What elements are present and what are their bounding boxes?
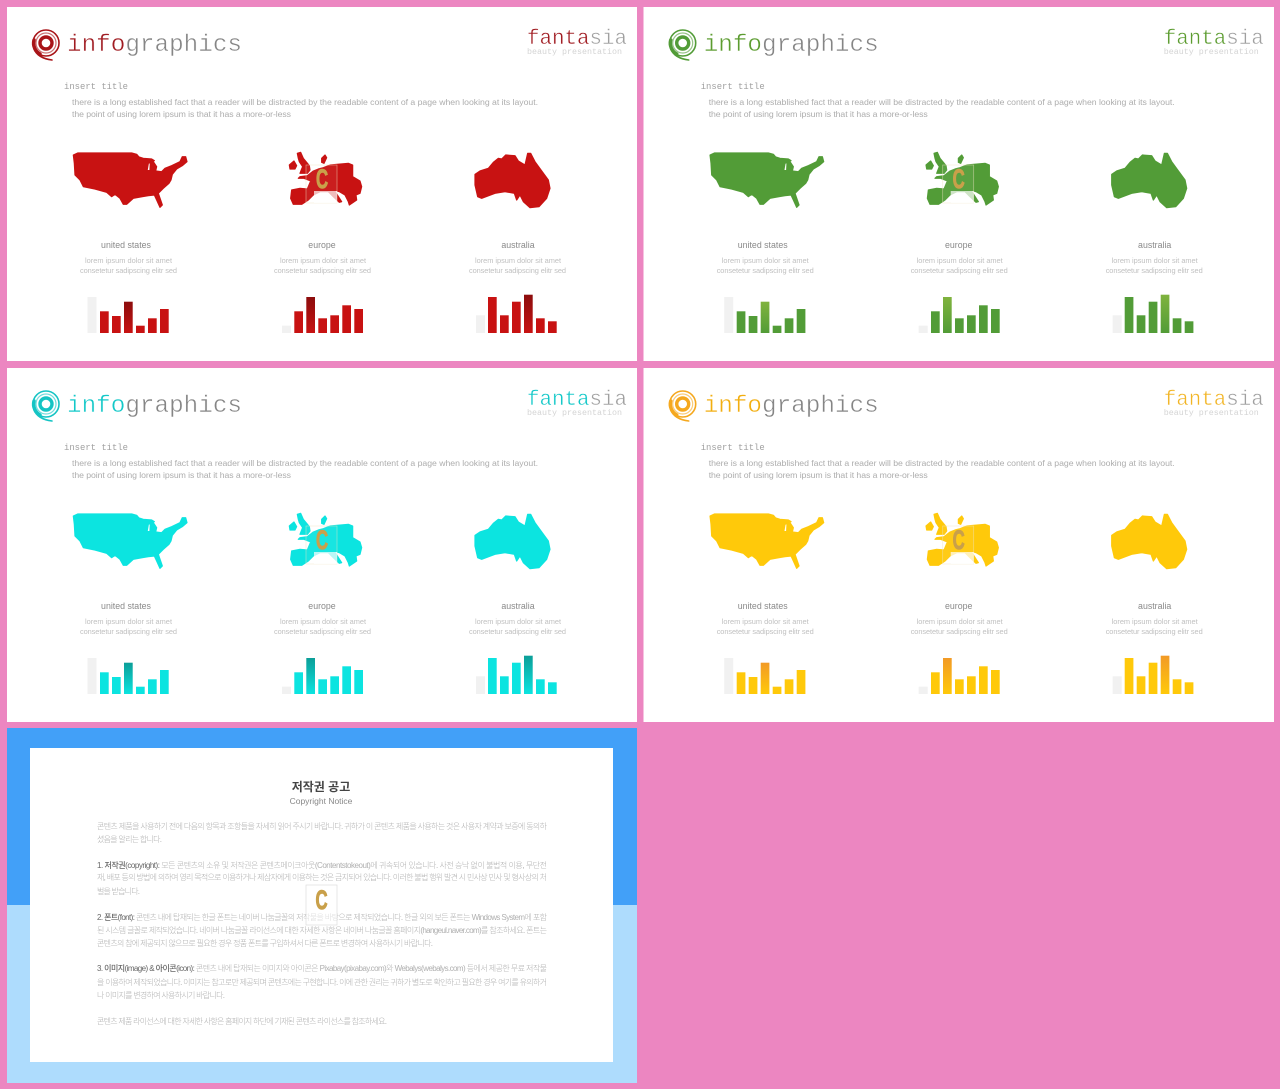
caption: europe: lorem ipsum dolor sit amet xyxy=(917,256,1003,265)
caption: united states xyxy=(717,617,814,636)
heading: copyright notice English: Copyright Notice xyxy=(290,796,353,806)
text: section 3 image and icon: 나 이미지를 변경하여 사용하시기 바랍니다. xyxy=(97,990,225,1000)
caption: united states: lorem ipsum dolor sit amet xyxy=(85,256,172,265)
text: section 2 font: 2. 폰트(font): 콘텐츠 내에 탑재되는 한글 폰트는 네이버 나눔글꼴의 저작물을 바탕으로 제작되었습니다. 한글 외의 보든 폰트는 Windows System에 포함 xyxy=(97,912,548,922)
label: united states: united states xyxy=(738,240,788,250)
label: europe: europe xyxy=(308,240,336,250)
caption: australia: lorem ipsum dolor sit amet xyxy=(475,256,561,265)
description text: the point of using lorem ipsum is that it has a more-or-less xyxy=(72,470,292,480)
brand: fantasia: fantasia xyxy=(527,28,627,51)
caption: australia: lorem ipsum dolor sit amet xyxy=(1112,617,1198,626)
caption: australia: consetetur sadipscing elitr sed xyxy=(469,266,566,275)
caption: australia: lorem ipsum dolor sit amet xyxy=(1112,256,1198,265)
title: infographics: infographics xyxy=(67,393,242,420)
caption: europe: consetetur sadipscing elitr sed xyxy=(911,627,1008,636)
icon: swirl logo xyxy=(670,30,696,60)
bar chart: united states xyxy=(724,297,805,333)
text: intro: 콘텐츠 제품을 사용하기 전에 다음의 항목과 조항들을 자세히 읽어 주시기 바랍니다. 귀하가 이 콘텐츠 제품을 사용하는 것은 사용자 계약과 보증에 동의하 xyxy=(97,821,548,831)
bar chart: europe xyxy=(919,297,1000,333)
caption: united states: lorem ipsum dolor sit amet xyxy=(85,617,172,626)
caption: united states: consetetur sadipscing elitr sed xyxy=(717,627,814,636)
map: australia xyxy=(475,514,550,569)
text: section 1 copyright: 1. 저작권(copyright): 모든 콘텐츠의 소유 및 저작권은 콘텐츠메이크아웃(Contentstokeout)에 귀속되어 있습니다. 사전 승낙 없이 불법적 이용, 무단전 xyxy=(97,860,547,870)
brand: fantasia: fantasia xyxy=(1164,389,1264,412)
bar chart: united states xyxy=(724,658,805,694)
bar chart: australia xyxy=(1113,295,1193,333)
heading: insert title: insert title xyxy=(701,82,765,92)
watermark logo xyxy=(306,885,337,925)
brand: fantasia: fantasia xyxy=(1164,28,1264,51)
text: intro: 셨음을 알리는 합니다. xyxy=(97,835,162,844)
description text xyxy=(72,97,538,119)
caption: united states: lorem ipsum dolor sit amet xyxy=(722,617,809,626)
description text xyxy=(72,458,538,480)
bar chart: australia xyxy=(476,295,557,333)
map: united states xyxy=(73,514,187,568)
caption: australia: consetetur sadipscing elitr sed xyxy=(469,627,566,636)
heading: insert title: insert title xyxy=(64,82,128,92)
label: australia: australia xyxy=(1138,240,1171,250)
description text xyxy=(709,458,1175,480)
caption: united states xyxy=(717,256,814,275)
bar chart: united states xyxy=(88,297,169,333)
caption: united states xyxy=(80,617,177,636)
text: section 1 copyright: 재, 배포 등의 방법에 의하여 영리 목적으로 이용하거나 제삼자에게 이용하는 것은 금지되어 있습니다. 이러한 불법 행위 발견 시 민사상 민사 및 형사상의 처 xyxy=(97,872,547,882)
label: europe: europe xyxy=(308,601,336,611)
caption: australia: consetetur sadipscing elitr sed xyxy=(1106,266,1203,275)
description text: there is a long established fact that a reader will be distracted by the readable content of a page when looking at its layout. xyxy=(72,97,538,107)
label: united states: united states xyxy=(101,240,152,250)
caption: europe: consetetur sadipscing elitr sed xyxy=(274,266,371,275)
caption: united states: consetetur sadipscing elitr sed xyxy=(80,266,177,275)
bar chart: australia xyxy=(1113,656,1193,694)
map: europe xyxy=(926,152,998,205)
panel: green infographic xyxy=(644,7,1274,361)
caption: australia: consetetur sadipscing elitr sed xyxy=(1106,627,1203,636)
map: united states xyxy=(710,153,824,207)
caption: united states xyxy=(80,256,177,275)
map: europe xyxy=(926,513,998,566)
label: australia: australia xyxy=(501,240,535,250)
text: section 3 image and icon xyxy=(97,963,547,1000)
map: europe xyxy=(289,513,362,566)
brand tagline: beauty presentation xyxy=(1164,47,1259,57)
title: infographics: infographics xyxy=(704,32,879,59)
label: united states: united states xyxy=(738,601,788,611)
caption: australia xyxy=(1106,617,1203,636)
text: section 1 copyright: 벌을 받습니다. xyxy=(97,887,140,896)
caption: europe: lorem ipsum dolor sit amet xyxy=(280,617,366,626)
label: australia: australia xyxy=(501,601,535,611)
text: section 3 image and icon: 3. 이미지(image) & 아이콘(icon): 콘텐츠 내에 탑재되는 이미지와 아이콘은 Pixabay(pixabay.com)와 Webalys(webalys.com) 등에서 제공한 무료 저작물 xyxy=(97,963,547,973)
caption: united states: consetetur sadipscing elitr sed xyxy=(717,266,814,275)
text: section 1 copyright xyxy=(97,860,547,896)
bar chart: europe xyxy=(282,658,363,694)
bar chart: australia xyxy=(476,656,557,694)
icon: swirl logo xyxy=(33,391,59,421)
label: europe: europe xyxy=(945,601,972,611)
icon: swirl logo xyxy=(670,391,696,421)
heading: insert title: insert title xyxy=(701,443,765,453)
map: united states xyxy=(710,514,824,568)
bar chart: europe xyxy=(919,658,1000,694)
text: section 3 image and icon: 을 이용하여 제작되었습니다. 이미지는 참고로만 제공되며 콘텐츠에는 구현합니다. 이에 관한 권리는 귀하가 별도로 확인하고 필요한 경우 여기를 유의하거 xyxy=(97,977,547,987)
caption: europe: consetetur sadipscing elitr sed xyxy=(274,627,371,636)
heading: insert title: insert title xyxy=(64,443,128,453)
caption: europe: consetetur sadipscing elitr sed xyxy=(911,266,1008,275)
text: license footer: 콘텐츠 제품 라이선스에 대한 자세한 사항은 홈페이지 하단에 기재된 콘텐츠 라이선스를 참조하세요. xyxy=(97,1016,387,1026)
caption: europe xyxy=(911,256,1008,275)
description text: the point of using lorem ipsum is that it has a more-or-less xyxy=(709,470,928,480)
caption: europe: lorem ipsum dolor sit amet xyxy=(917,617,1003,626)
description text: the point of using lorem ipsum is that it has a more-or-less xyxy=(72,109,292,119)
caption: australia xyxy=(469,617,566,636)
caption: europe: lorem ipsum dolor sit amet xyxy=(280,256,366,265)
caption: united states: lorem ipsum dolor sit amet xyxy=(722,256,809,265)
map: united states xyxy=(73,153,187,207)
description text: the point of using lorem ipsum is that it has a more-or-less xyxy=(709,109,928,119)
caption: australia xyxy=(1106,256,1203,275)
panel: copyright notice xyxy=(7,728,637,1083)
text: intro xyxy=(97,821,548,844)
caption: australia: lorem ipsum dolor sit amet xyxy=(475,617,561,626)
label: europe: europe xyxy=(945,240,972,250)
panel: red infographic xyxy=(7,7,637,361)
caption: europe xyxy=(274,617,371,636)
description text: there is a long established fact that a reader will be distracted by the readable content of a page when looking at its layout. xyxy=(709,458,1175,468)
text: section 2 font: 콘텐츠의 참에 제공되지 않으므로 필요한 경우 정품 폰트를 구입하셔서 다른 폰트로 변경하여 사용하시기 바랍니다. xyxy=(97,938,433,948)
label: united states: united states xyxy=(101,601,152,611)
label: australia: australia xyxy=(1138,601,1171,611)
caption: australia xyxy=(469,256,566,275)
map: australia xyxy=(1112,153,1187,208)
brand tagline: beauty presentation xyxy=(1164,408,1259,418)
map: europe xyxy=(289,152,362,205)
text: section 2 font xyxy=(97,912,548,948)
panel: yellow infographic xyxy=(644,368,1274,722)
watermark logo: C xyxy=(315,885,328,915)
caption: europe xyxy=(274,256,371,275)
map: australia xyxy=(475,153,550,208)
description text xyxy=(709,97,1175,119)
title: infographics: infographics xyxy=(704,393,879,420)
title: infographics: infographics xyxy=(67,32,242,59)
caption: united states: consetetur sadipscing elitr sed xyxy=(80,627,177,636)
brand tagline: beauty presentation xyxy=(527,408,622,418)
brand: fantasia: fantasia xyxy=(527,389,627,412)
heading: copyright notice Korean: 저작권 공고 xyxy=(292,779,350,794)
brand tagline: beauty presentation xyxy=(527,47,622,57)
panel: cyan infographic xyxy=(7,368,637,722)
text: section 2 font: 된 시스템 글꼴로 제작되었습니다. 네이버 나눔글꼴 라이선스에 대한 자세한 사항은 네이버 나눔글꼴 홈페이지(hangeul.naver.com)를 참조하세요. 폰트는 xyxy=(97,925,547,935)
caption: europe xyxy=(911,617,1008,636)
icon: swirl logo xyxy=(33,30,59,60)
description text: there is a long established fact that a reader will be distracted by the readable content of a page when looking at its layout. xyxy=(709,97,1175,107)
map: australia xyxy=(1112,514,1187,569)
bar chart: europe xyxy=(282,297,363,333)
description text: there is a long established fact that a reader will be distracted by the readable content of a page when looking at its layout. xyxy=(72,458,538,468)
bar chart: united states xyxy=(88,658,169,694)
